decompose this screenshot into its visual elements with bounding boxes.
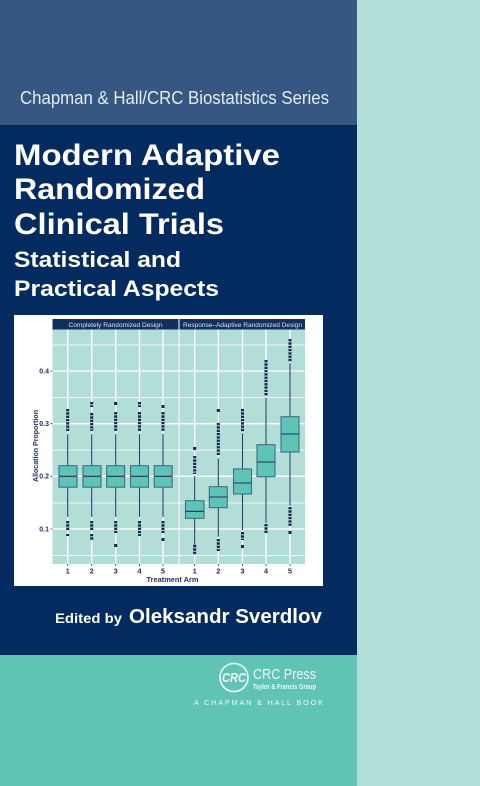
isolated outlier points — [114, 402, 292, 548]
panel: navy title area — [0, 125, 357, 655]
x axis title: Treatment Arm — [146, 575, 199, 584]
strip: response-adaptive randomized design: Response–Adaptive Randomized Design — [183, 322, 302, 329]
x axis: 5 — [161, 566, 165, 576]
y axis: 0.4 — [39, 368, 49, 376]
medians — [59, 434, 299, 511]
y axis title: Allocation Proportion — [31, 410, 40, 482]
x axis: 1 — [66, 566, 70, 576]
subtitle: Practical Aspects — [14, 276, 219, 301]
x axis: 3 — [240, 566, 245, 576]
strip: completely randomized design: Completely Randomized Design — [68, 322, 163, 329]
outliers — [68, 339, 290, 555]
series name: Chapman & Hall/CRC Biostatistics Series — [20, 88, 329, 108]
x axis: 1 — [193, 566, 197, 576]
panel: teal footer — [0, 655, 357, 786]
title: Randomized — [14, 173, 205, 206]
title: Modern Adaptive — [14, 139, 280, 172]
strip: response-adaptive randomized design — [180, 319, 305, 330]
boxes — [59, 417, 299, 518]
publisher group: Taylor & Francis Group — [253, 684, 316, 691]
y axis: 0.1 — [39, 526, 49, 534]
icon: CRC circle: CRC — [222, 671, 247, 685]
title: Clinical Trials — [14, 208, 224, 241]
title — [14, 139, 280, 241]
panel: series band — [0, 0, 357, 125]
x axis: 3 — [114, 566, 118, 576]
x axis: 2 — [90, 566, 94, 576]
plot panels — [52, 330, 305, 564]
editor credit: Edited by — [55, 610, 122, 626]
chart: allocation proportion box plots — [14, 315, 323, 586]
x axis: 5 — [288, 566, 292, 576]
publisher name: CRC Press — [253, 666, 316, 683]
whiskers — [68, 363, 290, 545]
x axis: 4 — [137, 566, 142, 576]
subtitle — [14, 247, 219, 301]
publisher logo — [194, 664, 323, 707]
editor credit: Oleksandr Sverdlov — [129, 606, 323, 628]
panel: right spine band — [357, 0, 480, 786]
y axis — [39, 368, 52, 534]
y axis: 0.3 — [39, 421, 49, 428]
y axis: 0.2 — [39, 474, 49, 481]
strip: completely randomized design — [52, 319, 178, 330]
subtitle: Statistical and — [14, 247, 181, 272]
x axis — [66, 564, 292, 576]
x axis: 2 — [216, 566, 220, 576]
imprint: A CHAPMAN & HALL BOOK — [194, 698, 323, 707]
x axis: 4 — [264, 566, 269, 576]
